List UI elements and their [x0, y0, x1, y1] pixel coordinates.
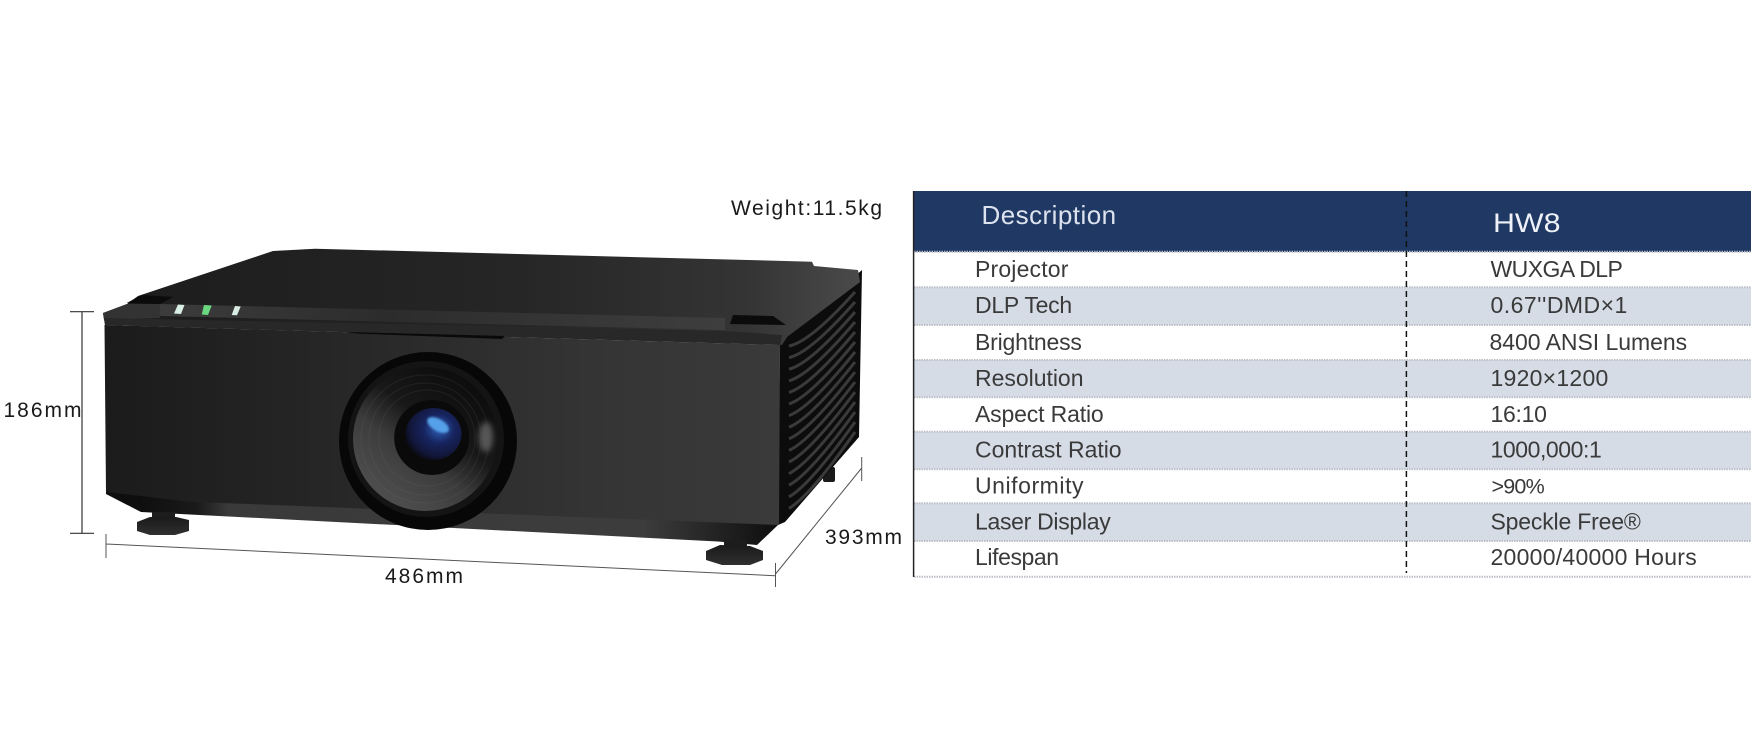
height dimension — [4, 312, 94, 533]
row: Resolution — [914, 360, 1751, 397]
row: Uniformity: >90% — [1492, 474, 1545, 498]
right lid notch — [730, 315, 786, 325]
height dimension: 186mm — [4, 399, 82, 422]
row: Contrast Ratio: 1000,000:1 — [1490, 436, 1602, 462]
table header — [913, 191, 1751, 252]
depth dimension — [776, 457, 902, 587]
row: Aspect Ratio — [975, 401, 1547, 427]
row: Laser Display — [914, 503, 1751, 541]
row: Projector: WUXGA DLP — [1490, 256, 1623, 282]
rear foot — [823, 467, 835, 482]
lid — [103, 249, 860, 345]
projector illustration — [103, 249, 862, 565]
depth dimension: 393mm — [825, 526, 902, 549]
base and skirt — [106, 490, 780, 545]
right foot — [706, 540, 763, 565]
row: Contrast Ratio: Contrast Ratio — [975, 436, 1122, 462]
row: Lifespan: Lifespan — [975, 544, 1059, 570]
front slit — [346, 332, 505, 339]
row: Laser Display: Speckle Free® — [1490, 508, 1641, 534]
row: Aspect Ratio: Aspect Ratio — [975, 401, 1104, 427]
row: Brightness — [975, 329, 1687, 355]
front panel — [104, 325, 780, 525]
row: Resolution: Resolution — [975, 365, 1084, 391]
row: Laser Display: Laser Display — [975, 508, 1111, 534]
row: Projector: Projector — [975, 256, 1069, 282]
row: Lifespan: 20000/40000 Hours — [1490, 544, 1697, 570]
row: Contrast Ratio — [914, 432, 1751, 469]
left lid notch — [127, 295, 173, 304]
row: Lifespan — [975, 544, 1697, 570]
row: Brightness: Brightness — [975, 329, 1082, 355]
row: DLP Tech — [914, 287, 1751, 325]
row: Projector — [975, 256, 1623, 282]
width dimension: 486mm — [385, 565, 463, 588]
row: Resolution: 1920×1200 — [1490, 365, 1608, 391]
row: Brightness: 8400 ANSI Lumens — [1490, 329, 1687, 355]
row: Uniformity — [975, 472, 1545, 498]
vented side panel — [778, 270, 862, 525]
specification table — [913, 191, 1751, 577]
width dimension — [106, 534, 775, 588]
table header: HW8 — [1493, 208, 1560, 238]
table header: Description — [982, 200, 1116, 230]
weight label: Weight:11.5kg — [731, 197, 882, 220]
status LEDs — [174, 304, 241, 315]
left foot — [137, 512, 189, 535]
row: Aspect Ratio: 16:10 — [1490, 401, 1547, 427]
row: Uniformity: Uniformity — [975, 472, 1084, 498]
lens — [339, 352, 517, 530]
row: DLP Tech: 0.67''DMD×1 — [1490, 292, 1627, 318]
row: DLP Tech: DLP Tech — [975, 292, 1072, 318]
